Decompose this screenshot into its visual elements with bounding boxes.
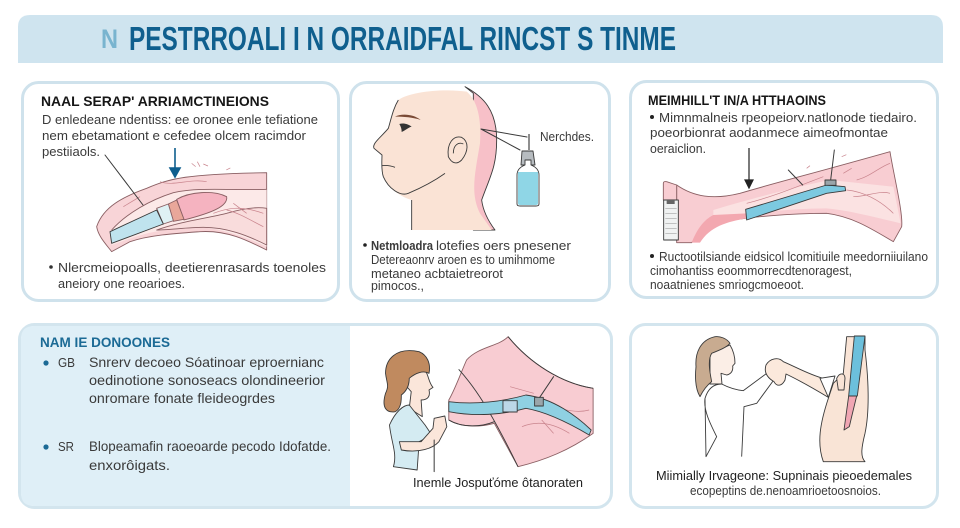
caption xyxy=(656,469,912,498)
intro text: nem ebetamationt e cefedee olcem racimdor xyxy=(42,129,306,143)
title: PESTRROALI I N ORRAIDFAL RINCST S TINME xyxy=(129,21,676,58)
vessel illustration xyxy=(663,150,902,243)
bottom bullet: Nlercmeiopoalls, deetierenrasards toenoles xyxy=(58,261,326,275)
intro bullet: poeorbionrat aodanmece aimeofmontae xyxy=(650,126,888,140)
header band xyxy=(18,15,943,63)
intro bullet: Mimnmalneis rpeopeiorv.natlonode tiedairo. xyxy=(659,111,917,125)
pointer line xyxy=(105,155,143,205)
panel heading: NAAL SERAP' ARRIAMCTINEIONS xyxy=(41,93,269,109)
intro bullet: oeraiclion. xyxy=(650,142,706,156)
option SR: SR xyxy=(58,440,74,454)
bullet text: Netmloadra xyxy=(371,239,434,253)
caption: ecopeptins de.nenoamrioetoosnoios. xyxy=(690,484,881,498)
bullet text: metaneo acbtaietreorot xyxy=(371,267,504,281)
option GB: GB xyxy=(58,356,75,370)
panel: minimally invasive summary xyxy=(630,324,938,508)
option GB: Snrerv decoeo Sóatinoar eproernianc xyxy=(89,354,324,370)
face illustration xyxy=(374,87,497,230)
clinician and limb illustration xyxy=(695,336,868,462)
bottom bullet: cimohantiss eoommorrecdtenoragest, xyxy=(650,264,852,278)
bullet text: pimocos., xyxy=(371,279,424,293)
arrow xyxy=(170,148,180,177)
tinted text column xyxy=(21,326,350,506)
icon: spray bottle xyxy=(517,134,539,206)
panel: minimally invasive methods xyxy=(630,82,938,298)
option SR: Blopeamafin raoeoarde pecodo Idofatde. xyxy=(89,438,331,454)
option GB: oedinotione sonoseacs olondineerior xyxy=(89,372,325,388)
intro bullet xyxy=(650,111,917,156)
pointer lines xyxy=(481,129,527,150)
panel: nasal spray xyxy=(22,82,338,300)
nasal cavity illustration xyxy=(97,162,267,252)
panel heading: NAM IE DONOONES xyxy=(40,334,170,350)
bullet text: lotefies oers pnesener xyxy=(436,239,571,253)
patient and tube illustration xyxy=(384,337,593,472)
option GB: onromare fonate fleideogrdes xyxy=(89,390,275,406)
bottom bullet: aneiory one reoarioes. xyxy=(58,277,185,291)
bottom bullet xyxy=(49,261,326,291)
bottom bullet xyxy=(650,250,928,292)
intro text xyxy=(42,113,318,159)
title: N xyxy=(101,24,118,54)
bottle label: Nerchdes. xyxy=(540,130,594,144)
panel: name options xyxy=(20,324,612,508)
option SR: enxorôigats. xyxy=(89,457,170,473)
intro text: pestiiaols. xyxy=(42,145,100,159)
option SR xyxy=(43,438,331,473)
illustration caption: Inemle Jospuťóme ôtanoraten xyxy=(413,476,583,490)
caption: Miimially Irvageone: Supninais pieoedemales xyxy=(656,469,912,483)
intro text: D enledeane ndentiss: ee oronee enle tefiatione xyxy=(42,113,318,127)
bottom bullet: noaatnienes smriogcmoeoot. xyxy=(650,278,804,292)
bullet text xyxy=(363,239,571,293)
panel: face profile xyxy=(350,82,610,300)
panel heading: MEIMHILL'T IN/A HTTHAOINS xyxy=(648,92,826,108)
arrow xyxy=(745,148,753,188)
option GB xyxy=(43,354,325,406)
bullet text: Detereaonrv aroen es to umihmome xyxy=(371,252,555,267)
bottom bullet: Ructootilsiande eidsicol lcomitiuile meedorniiuilano xyxy=(659,250,928,264)
